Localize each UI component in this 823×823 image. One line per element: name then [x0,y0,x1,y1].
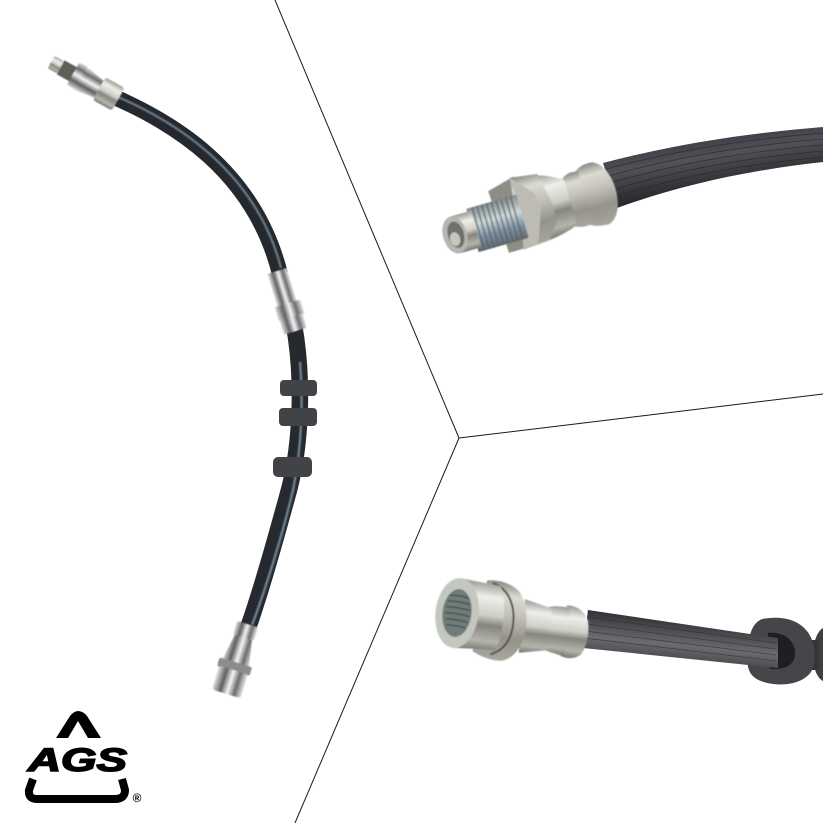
rear bead [561,170,593,229]
ribbed hose [583,610,778,668]
second grommet [813,628,823,681]
neck between grommets [805,640,819,670]
face ring [431,576,483,650]
body [453,578,508,653]
neck [519,599,553,656]
divider lines [275,0,823,823]
full brake hose [45,50,317,699]
rubber grommets [273,380,317,477]
detail: female threaded end [431,574,823,684]
detail: male threaded end [432,127,823,270]
flange slot [484,583,518,657]
bottom end fitting [210,619,264,699]
crimp collar [560,605,591,660]
middle crimp fitting [265,267,309,335]
grommet opening [768,633,795,669]
fitting body [432,151,625,270]
rear bead [543,605,571,656]
registered mark: ® [133,791,142,805]
AGS logo [27,711,142,805]
fitting body [431,574,593,671]
logo chevron [56,711,101,738]
slotted flange [472,579,531,663]
top end fitting [45,50,125,111]
ribbed hose [603,127,823,208]
hose lower section [248,325,302,628]
thread [466,195,529,252]
back flange [486,176,537,254]
ball section [530,167,579,241]
hose upper section [112,96,281,274]
nose tip [450,211,481,253]
crimp collar [573,158,624,229]
logo wordmark: AGS [27,742,128,778]
rubber grommet [748,618,815,684]
hex nut [504,168,562,250]
logo base bracket [29,779,125,799]
threaded bore [440,587,474,639]
